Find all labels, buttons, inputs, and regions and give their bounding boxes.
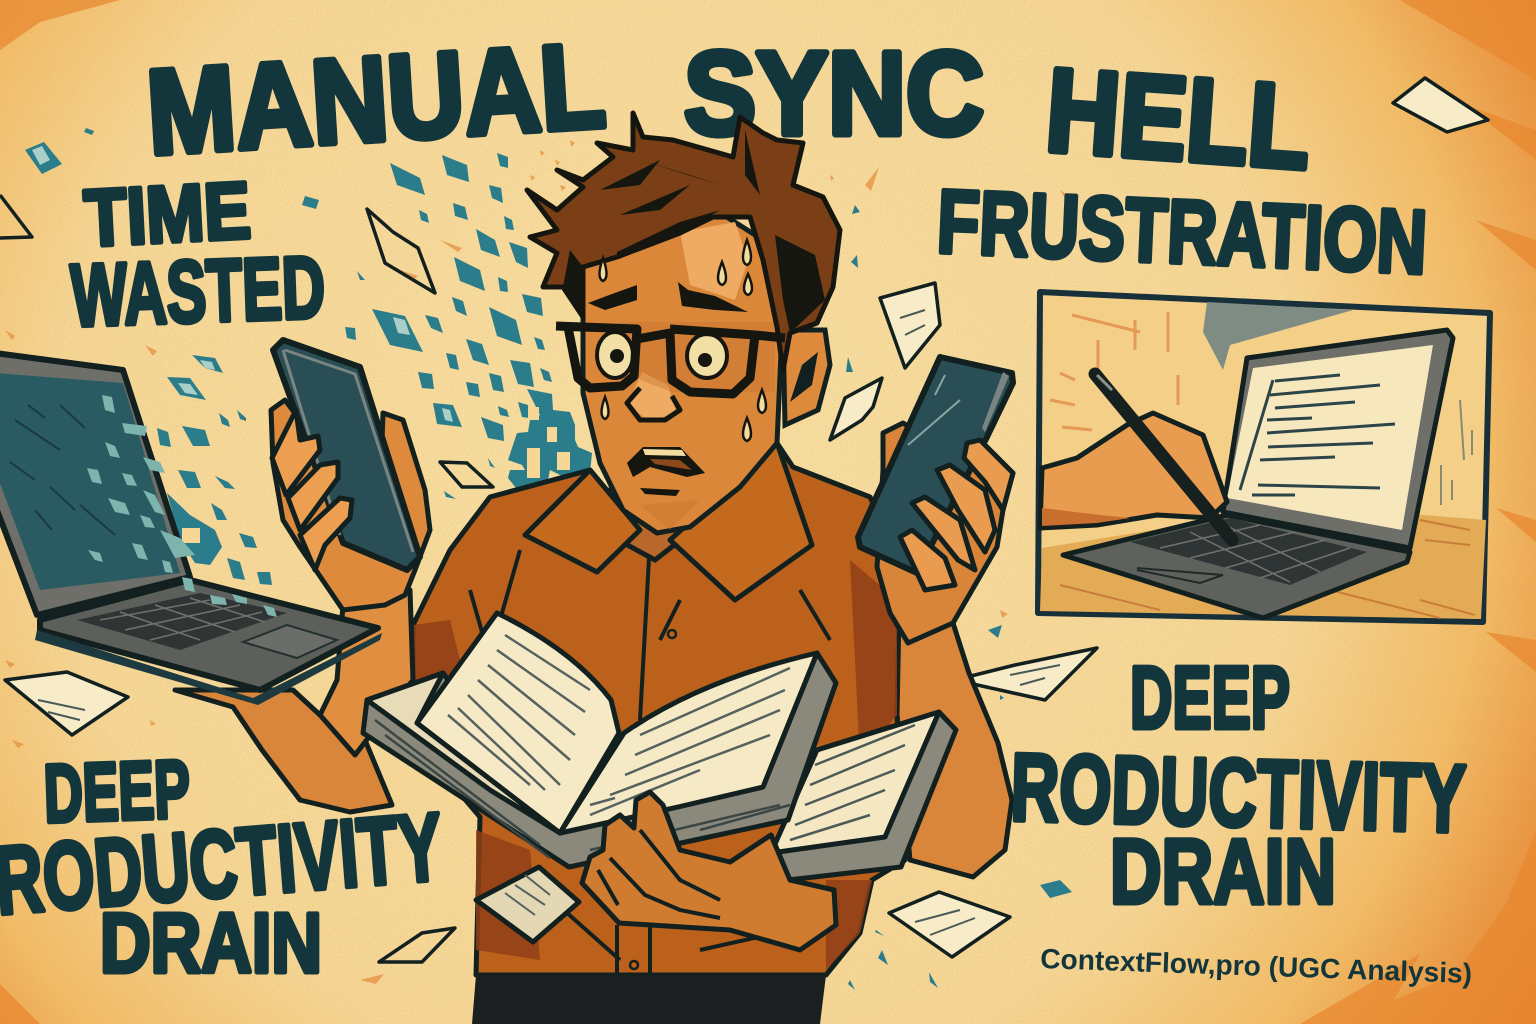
- finger creases: [598, 830, 720, 918]
- fingers: [272, 410, 352, 570]
- shirt collar: [525, 443, 812, 600]
- face: [583, 200, 782, 533]
- right hand and phone: [858, 357, 1013, 643]
- label: time wasted: TIME: [82, 165, 253, 263]
- shirt: [413, 443, 905, 1024]
- label: deep productivity drain, right: [1009, 648, 1467, 923]
- laptop base: [1063, 515, 1410, 618]
- hair: [527, 113, 840, 370]
- book: main stack: [363, 653, 836, 867]
- book: small right: [771, 712, 956, 880]
- nose: [627, 388, 680, 420]
- shirt placket and buttons: [470, 540, 830, 975]
- hand: [1040, 413, 1227, 528]
- laptop: left: [0, 353, 382, 705]
- arm: left forearm: [320, 590, 413, 755]
- label: deep productivity drain, right: DEEP: [1130, 648, 1290, 747]
- title word: hell: HELL: [1042, 44, 1315, 194]
- glasses: [556, 326, 785, 394]
- laptop screen: [1223, 330, 1453, 548]
- pen: [1095, 374, 1232, 540]
- shadow shape: [1203, 302, 1353, 370]
- loose sheet: [476, 867, 579, 942]
- face highlights: [628, 222, 748, 422]
- hair shadows: [563, 130, 825, 333]
- label: deep productivity drain, left: RODUCTIVITY: [0, 793, 446, 935]
- label: deep productivity drain, left: DEEP: [42, 744, 192, 840]
- title word: sync: SYNC: [684, 28, 984, 160]
- fingers: [900, 440, 1013, 590]
- escaping pixels: [87, 395, 195, 573]
- left hand: [271, 340, 430, 610]
- title word: manual: MANUAL: [143, 18, 609, 180]
- wall bricks: [1050, 312, 1178, 430]
- trousers: [472, 975, 826, 1024]
- head: [527, 113, 840, 533]
- eyes: [597, 332, 727, 378]
- phone: left: [273, 340, 420, 570]
- holding hand: [582, 792, 836, 950]
- books: [363, 613, 956, 942]
- arm: right forearm: [890, 613, 1012, 877]
- source credit: ContextFlow,pro (UGC Analysis): [1040, 943, 1473, 989]
- ear: [783, 330, 830, 425]
- label: deep productivity drain, right: DRAIN: [1110, 821, 1336, 923]
- label: deep productivity drain, left: [0, 744, 446, 990]
- title: [143, 18, 1315, 194]
- desk: [1040, 515, 1486, 619]
- label: time wasted: WASTED: [69, 237, 327, 345]
- label: deep productivity drain, left: DRAIN: [100, 896, 322, 990]
- sweat drops: [600, 240, 766, 441]
- label: time wasted: [69, 165, 327, 345]
- arm: lower left: [175, 690, 392, 812]
- eyebrows: [588, 282, 748, 312]
- teal data fragments: [25, 128, 1072, 990]
- inset panel: typing on laptop: [1038, 292, 1490, 622]
- neck: [600, 445, 775, 560]
- mouth: [627, 447, 705, 496]
- phone: right: [858, 357, 1013, 573]
